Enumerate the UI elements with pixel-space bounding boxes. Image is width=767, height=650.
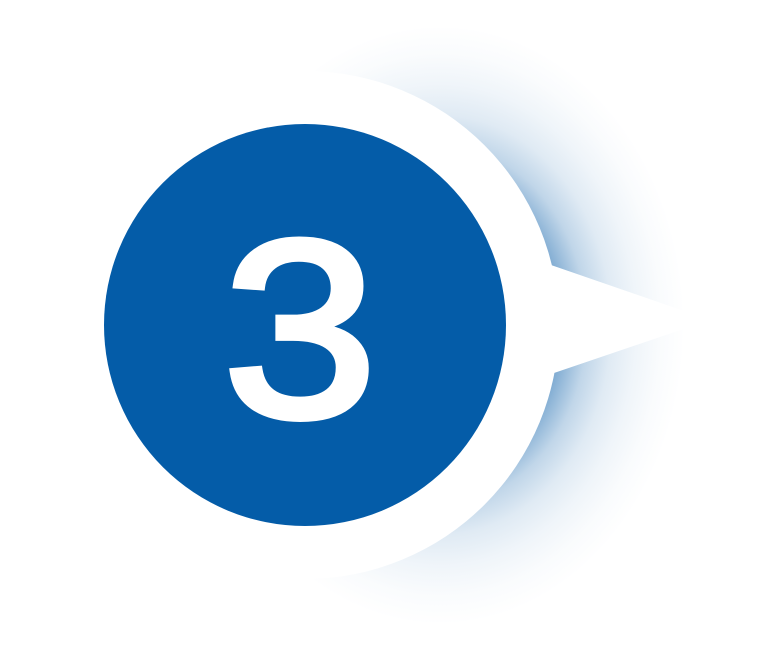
white pointer badge — [51, 71, 710, 579]
soft blue shadow — [190, 20, 690, 630]
blue circle — [104, 124, 506, 526]
number three: 3 — [223, 189, 377, 470]
